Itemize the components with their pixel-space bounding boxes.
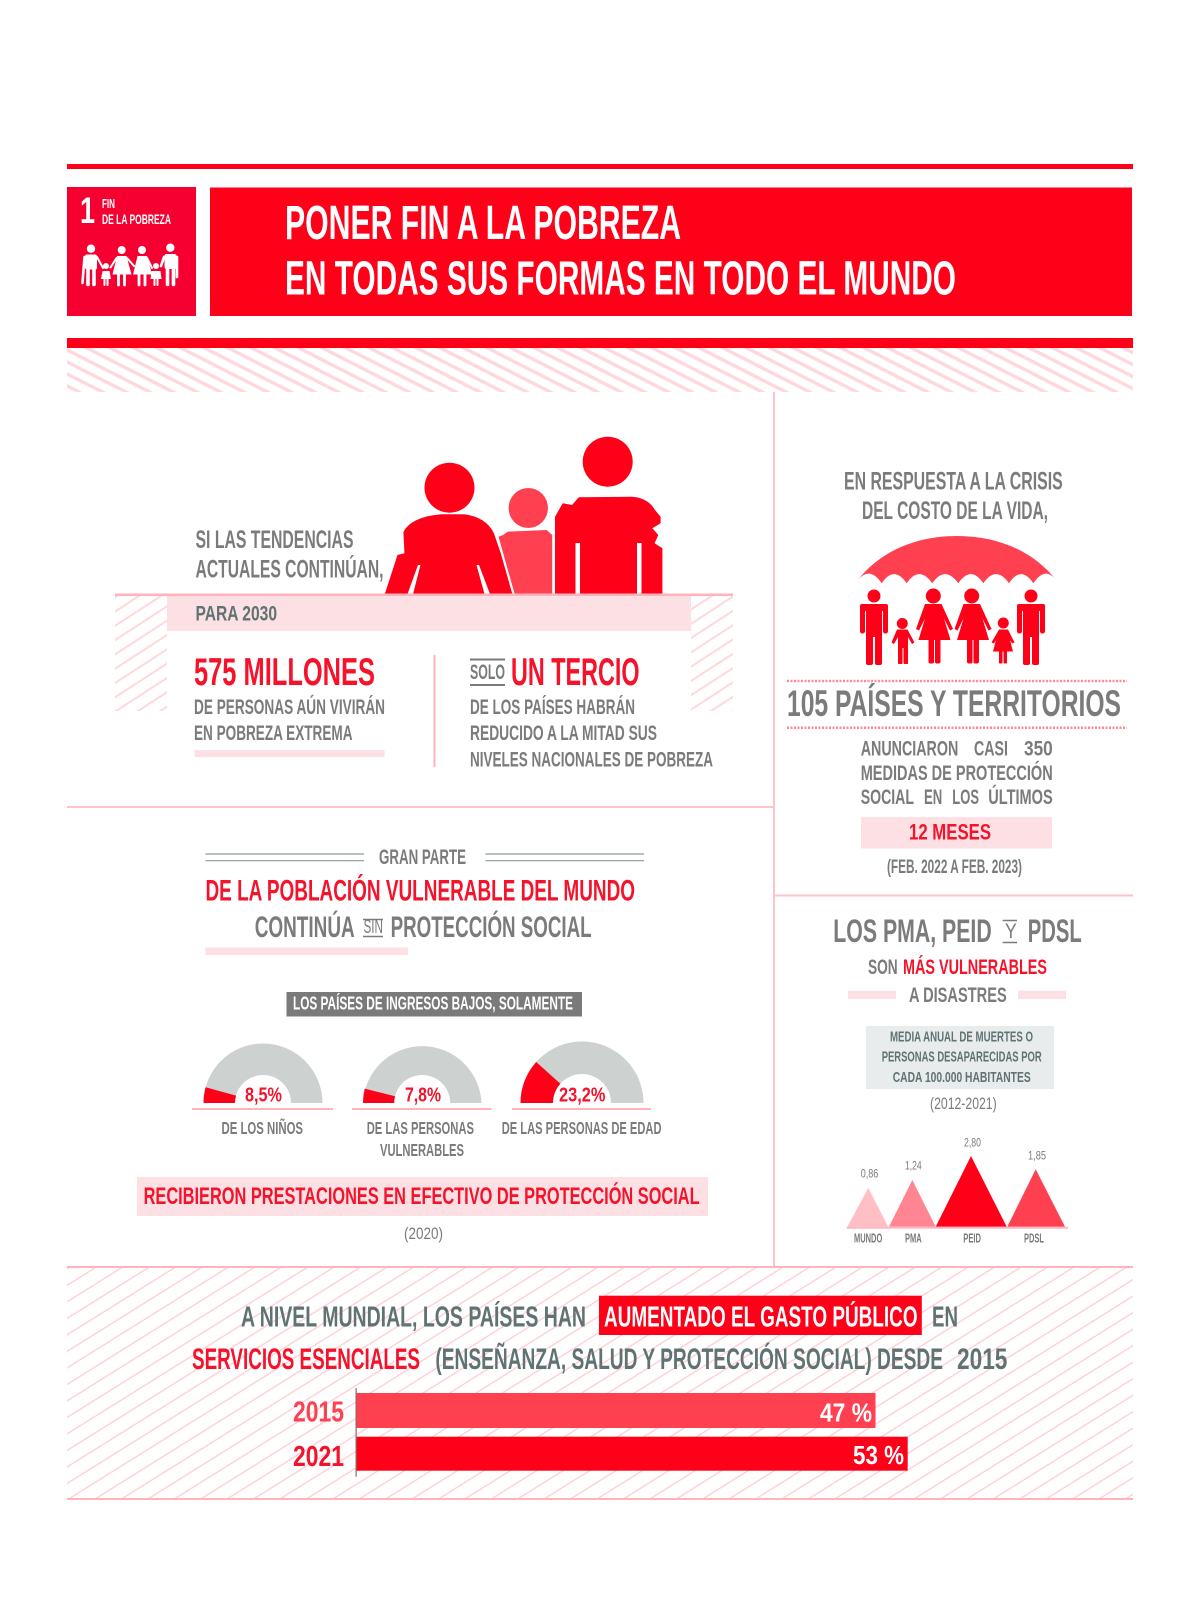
text: measures xyxy=(861,738,1053,809)
heading: GRAN PARTE xyxy=(379,846,466,869)
callout: benefits xyxy=(137,1177,708,1216)
panel: poverty by 2030 xyxy=(115,437,733,772)
legend box: MEDIA ANUAL DE MUERTES O xyxy=(890,1030,1033,1046)
heading: A NIVEL MUNDIAL, LOS PAÍSES HAN xyxy=(241,1300,586,1334)
gauge: vulnerable people xyxy=(352,1046,492,1160)
icon: SDG 1 badge xyxy=(67,187,196,316)
panel: header xyxy=(67,187,1132,316)
triangle chart: MUNDO xyxy=(854,1231,882,1245)
text: year: (2020) xyxy=(404,1224,443,1243)
callout: benefits: RECIBIERON PRESTACIONES EN EFECTIVO DE PROTECCIÓN SOCIAL xyxy=(144,1182,700,1210)
triangle chart: 0,86 xyxy=(861,1166,879,1180)
band: para 2030: PARA 2030 xyxy=(196,603,277,626)
gauge: vulnerable people: DE LAS PERSONAS xyxy=(367,1118,474,1138)
triangle chart: PEID xyxy=(963,1231,981,1245)
triangle chart: 1,85 xyxy=(1028,1149,1046,1163)
banner xyxy=(210,188,1132,316)
heading xyxy=(206,846,644,955)
text: trends: ACTUALES CONTINÚAN, xyxy=(196,554,384,584)
text: measures: ANUNCIARON xyxy=(861,738,958,761)
text: crisis: DEL COSTO DE LA VIDA, xyxy=(862,497,1048,525)
bar chart: 2021 xyxy=(293,1441,344,1473)
text: trends: SI LAS TENDENCIAS xyxy=(196,526,354,554)
heading: 2015 xyxy=(957,1343,1007,1376)
title: PONER FIN A LA POBREZA xyxy=(285,197,681,250)
heading xyxy=(192,1296,1007,1376)
heading: SIN xyxy=(364,917,383,938)
heading: DE LA POBLACIÓN VULNERABLE DEL MUNDO xyxy=(206,874,635,908)
panel: vulnerable population xyxy=(137,846,708,1243)
heading: PROTECCIÓN SOCIAL xyxy=(391,910,592,944)
label: low income countries xyxy=(286,992,582,1016)
stat: 575 millones: DE PERSONAS AÚN VIVIRÁN xyxy=(194,695,385,719)
hatch: left xyxy=(115,596,167,711)
icon: SDG 1 badge: 1 xyxy=(80,190,95,231)
text: measures: 350 xyxy=(1024,738,1053,761)
text: measures: SOCIAL xyxy=(861,786,914,809)
heading: EN xyxy=(932,1302,958,1334)
callout: 12 months: 12 MESES xyxy=(909,820,991,845)
stat: un tercio: REDUCIDO A LA MITAD SUS xyxy=(470,722,657,745)
text: trends xyxy=(196,526,384,584)
gauge: older people: DE LAS PERSONAS DE EDAD xyxy=(502,1118,662,1138)
text: measures: MEDIDAS DE PROTECCIÓN xyxy=(861,761,1053,785)
thick rule xyxy=(67,338,1133,348)
heading: SERVICIOS ESENCIALES xyxy=(192,1343,420,1376)
panel: public spending xyxy=(67,1266,1133,1500)
triangle chart: 2,80 xyxy=(964,1135,981,1149)
heading: MÁS VULNERABLES xyxy=(903,956,1047,979)
gauge: children: 8,5% xyxy=(245,1084,282,1107)
heading: PDSL xyxy=(1028,913,1082,949)
legend box xyxy=(866,1026,1054,1089)
stat: un tercio: SOLO xyxy=(470,661,505,684)
top rule xyxy=(67,164,1133,169)
callout: 12 months xyxy=(861,817,1052,848)
heading: SON xyxy=(868,956,898,979)
triangle chart: 1,24 xyxy=(905,1159,922,1173)
label: low income countries: LOS PAÍSES DE INGRESOS BAJOS, SOLAMENTE xyxy=(293,993,573,1014)
stat: un tercio xyxy=(470,651,713,772)
text: period: (FEB. 2022 A FEB. 2023) xyxy=(887,857,1022,878)
icon: SDG 1 badge: DE LA POBREZA xyxy=(102,211,171,227)
heading: AUMENTADO EL GASTO PÚBLICO xyxy=(604,1300,918,1334)
gauge: vulnerable people: 7,8% xyxy=(405,1084,441,1107)
bar chart: 53 % xyxy=(853,1440,904,1470)
heading: LOS PMA, PEID xyxy=(833,913,992,949)
heading: A DISASTRES xyxy=(909,984,1007,1007)
stat: un tercio: DE LOS PAÍSES HABRÁN xyxy=(470,696,635,719)
gauge: vulnerable people: VULNERABLES xyxy=(380,1140,464,1160)
gauge: older people xyxy=(502,1042,662,1138)
bar chart: 2015 xyxy=(293,1397,344,1429)
stat: un tercio: NIVELES NACIONALES DE POBREZA xyxy=(470,748,713,772)
legend box: CADA 100.000 HABITANTES xyxy=(893,1070,1031,1086)
heading xyxy=(833,913,1082,1007)
bar chart: 47 % xyxy=(820,1398,872,1428)
panel: disasters xyxy=(833,913,1082,1245)
triangle chart: PDSL xyxy=(1024,1231,1044,1245)
text: measures: EN xyxy=(924,786,942,809)
band: para 2030 xyxy=(167,596,691,631)
stat: 575 millones: EN POBREZA EXTREMA xyxy=(194,722,352,745)
text: measures: CASI xyxy=(974,738,1008,761)
text: measures: ÚLTIMOS xyxy=(988,785,1053,809)
stat: un tercio: UN TERCIO xyxy=(511,651,640,694)
triangle chart: PMA xyxy=(905,1231,922,1245)
icon: SDG 1 badge: FIN xyxy=(102,196,115,211)
hatch: right xyxy=(691,596,733,711)
stat: 575 millones: 575 MILLONES xyxy=(194,651,375,694)
title xyxy=(285,197,956,306)
icon: umbrella xyxy=(858,536,1056,583)
bar chart xyxy=(293,1388,908,1477)
text: period: (2012-2021) xyxy=(930,1095,997,1113)
legend box: PERSONAS DESAPARECIDAS POR xyxy=(882,1050,1042,1066)
stat: 575 millones xyxy=(194,651,385,757)
text: measures: LOS xyxy=(952,786,979,809)
gauge: children xyxy=(192,1044,333,1138)
heading: CONTINÚA xyxy=(255,910,355,944)
heading: Y xyxy=(1005,920,1017,943)
icon: people xyxy=(860,588,1045,665)
text: crisis: EN RESPUESTA A LA CRISIS xyxy=(844,468,1063,496)
gauge: children: DE LOS NIÑOS xyxy=(222,1117,303,1138)
icon: family xyxy=(385,437,662,594)
text: crisis xyxy=(844,468,1063,525)
gauge: older people: 23,2% xyxy=(559,1084,606,1107)
panel: social protection response xyxy=(787,468,1127,878)
triangle chart xyxy=(847,1135,1068,1245)
